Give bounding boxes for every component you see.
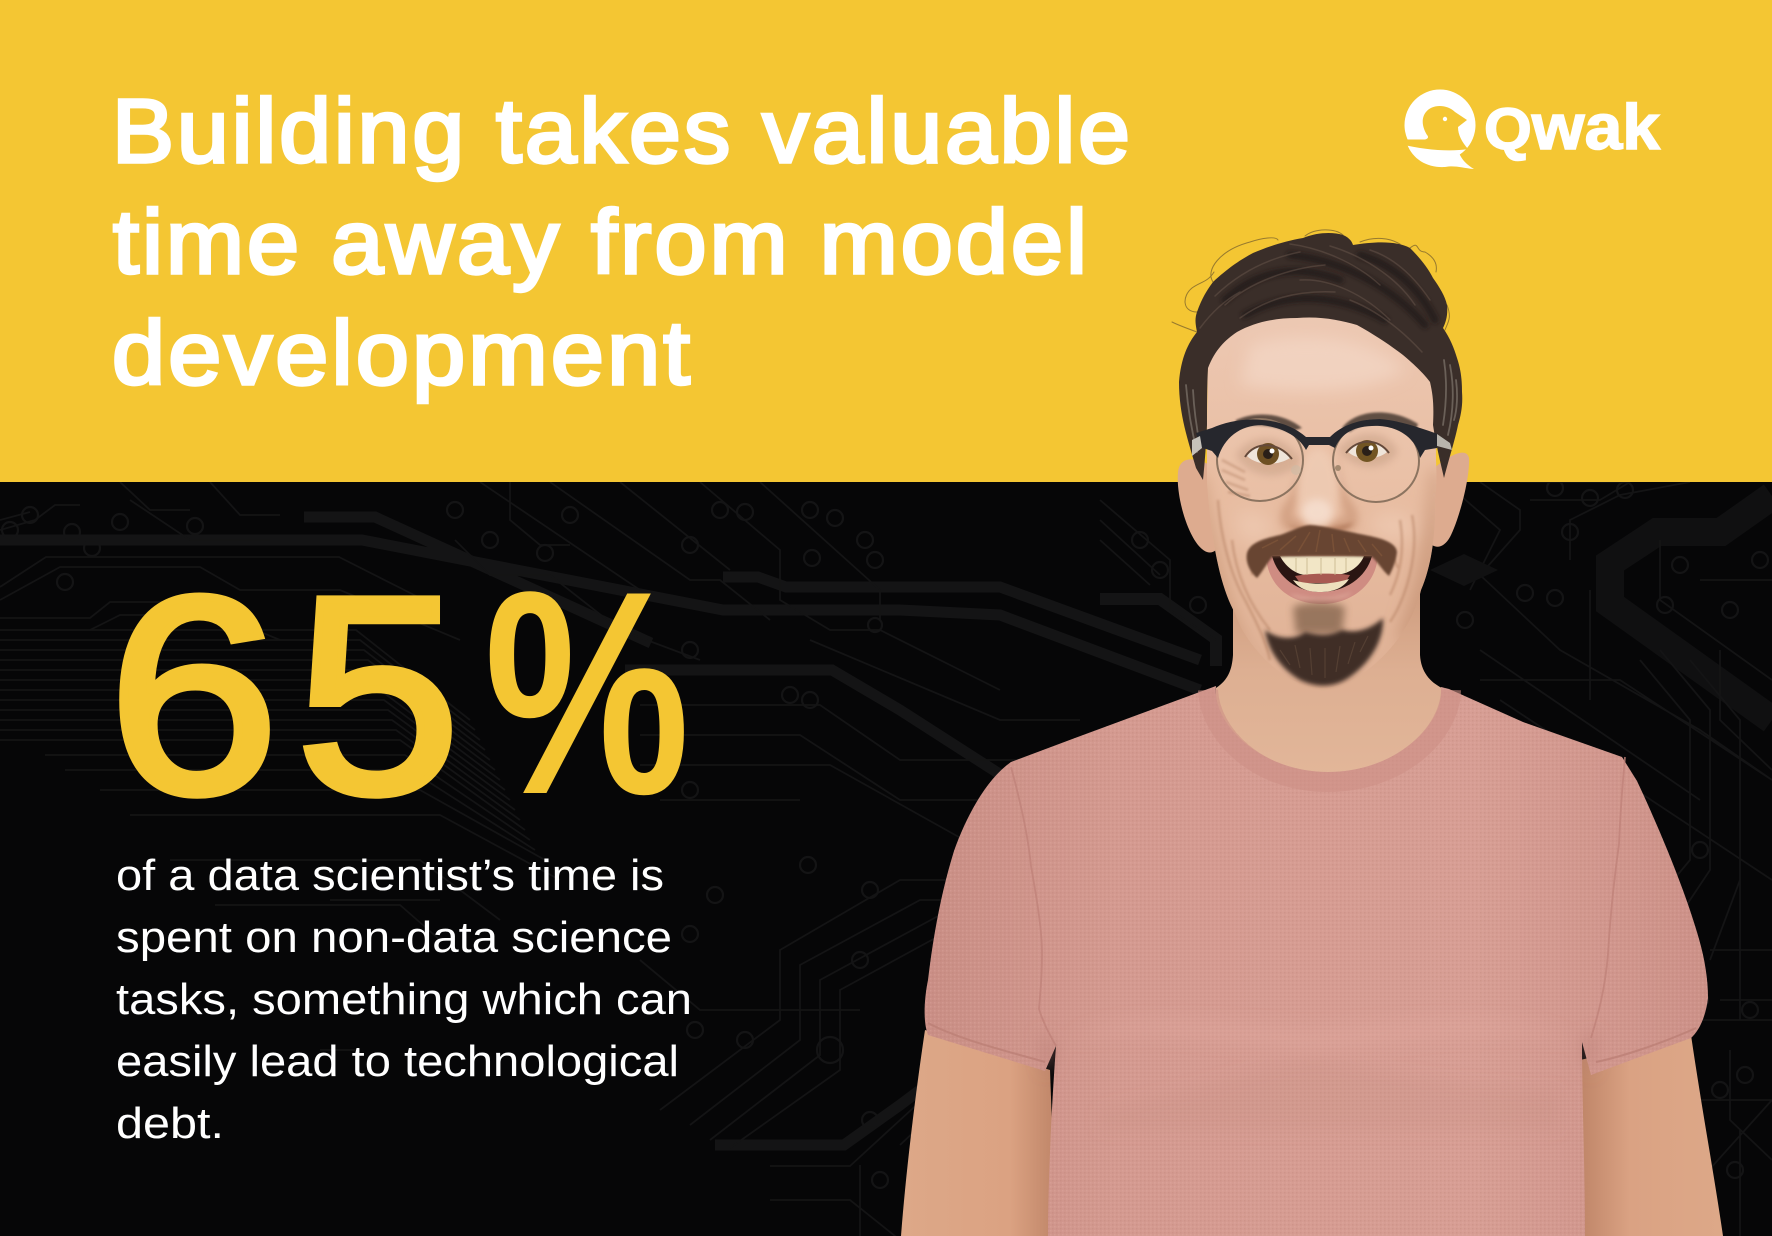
hair (1172, 230, 1462, 480)
photo: smiling man in pink t-shirt (901, 230, 1723, 1236)
body text (116, 851, 692, 1148)
t-shirt (925, 686, 1708, 1236)
body text: of a data scientist’s time is (116, 851, 664, 900)
logo wordmark: Qwak (1484, 91, 1660, 163)
moustache (1247, 525, 1397, 578)
ear right (1432, 453, 1469, 547)
logo: Qwak (1398, 90, 1660, 169)
body text: easily lead to technological (116, 1037, 679, 1086)
glasses (1192, 419, 1452, 502)
title (112, 82, 1133, 404)
title: time away from model (113, 193, 1090, 293)
big statistic: 65%: 6 (108, 540, 279, 852)
body text: tasks, something which can (116, 975, 692, 1024)
right arm (1580, 1035, 1723, 1236)
head (1207, 318, 1436, 660)
big statistic: 65%: 5 (296, 540, 460, 852)
title: Building takes valuable (112, 82, 1133, 182)
left arm (901, 1030, 1056, 1236)
nose (1280, 445, 1358, 537)
body text: debt. (116, 1099, 224, 1148)
big statistic: 65%: % (484, 531, 690, 855)
eyes (1236, 434, 1398, 476)
goatee (1265, 602, 1383, 686)
neck (1216, 585, 1442, 775)
circuit board background pattern (0, 480, 1772, 1236)
black background panel (0, 482, 1772, 1236)
icon: duck in speech bubble (1398, 90, 1476, 169)
yellow header band (0, 0, 1772, 482)
title: development (112, 304, 693, 404)
body text: spent on non-data science (116, 913, 672, 962)
face shading (1207, 338, 1436, 660)
eyebrows (1236, 412, 1418, 432)
smile lines and wrinkles (1218, 460, 1414, 660)
ear left (1178, 459, 1216, 552)
big statistic: 65% (108, 531, 690, 855)
mouth and teeth (1266, 548, 1378, 604)
